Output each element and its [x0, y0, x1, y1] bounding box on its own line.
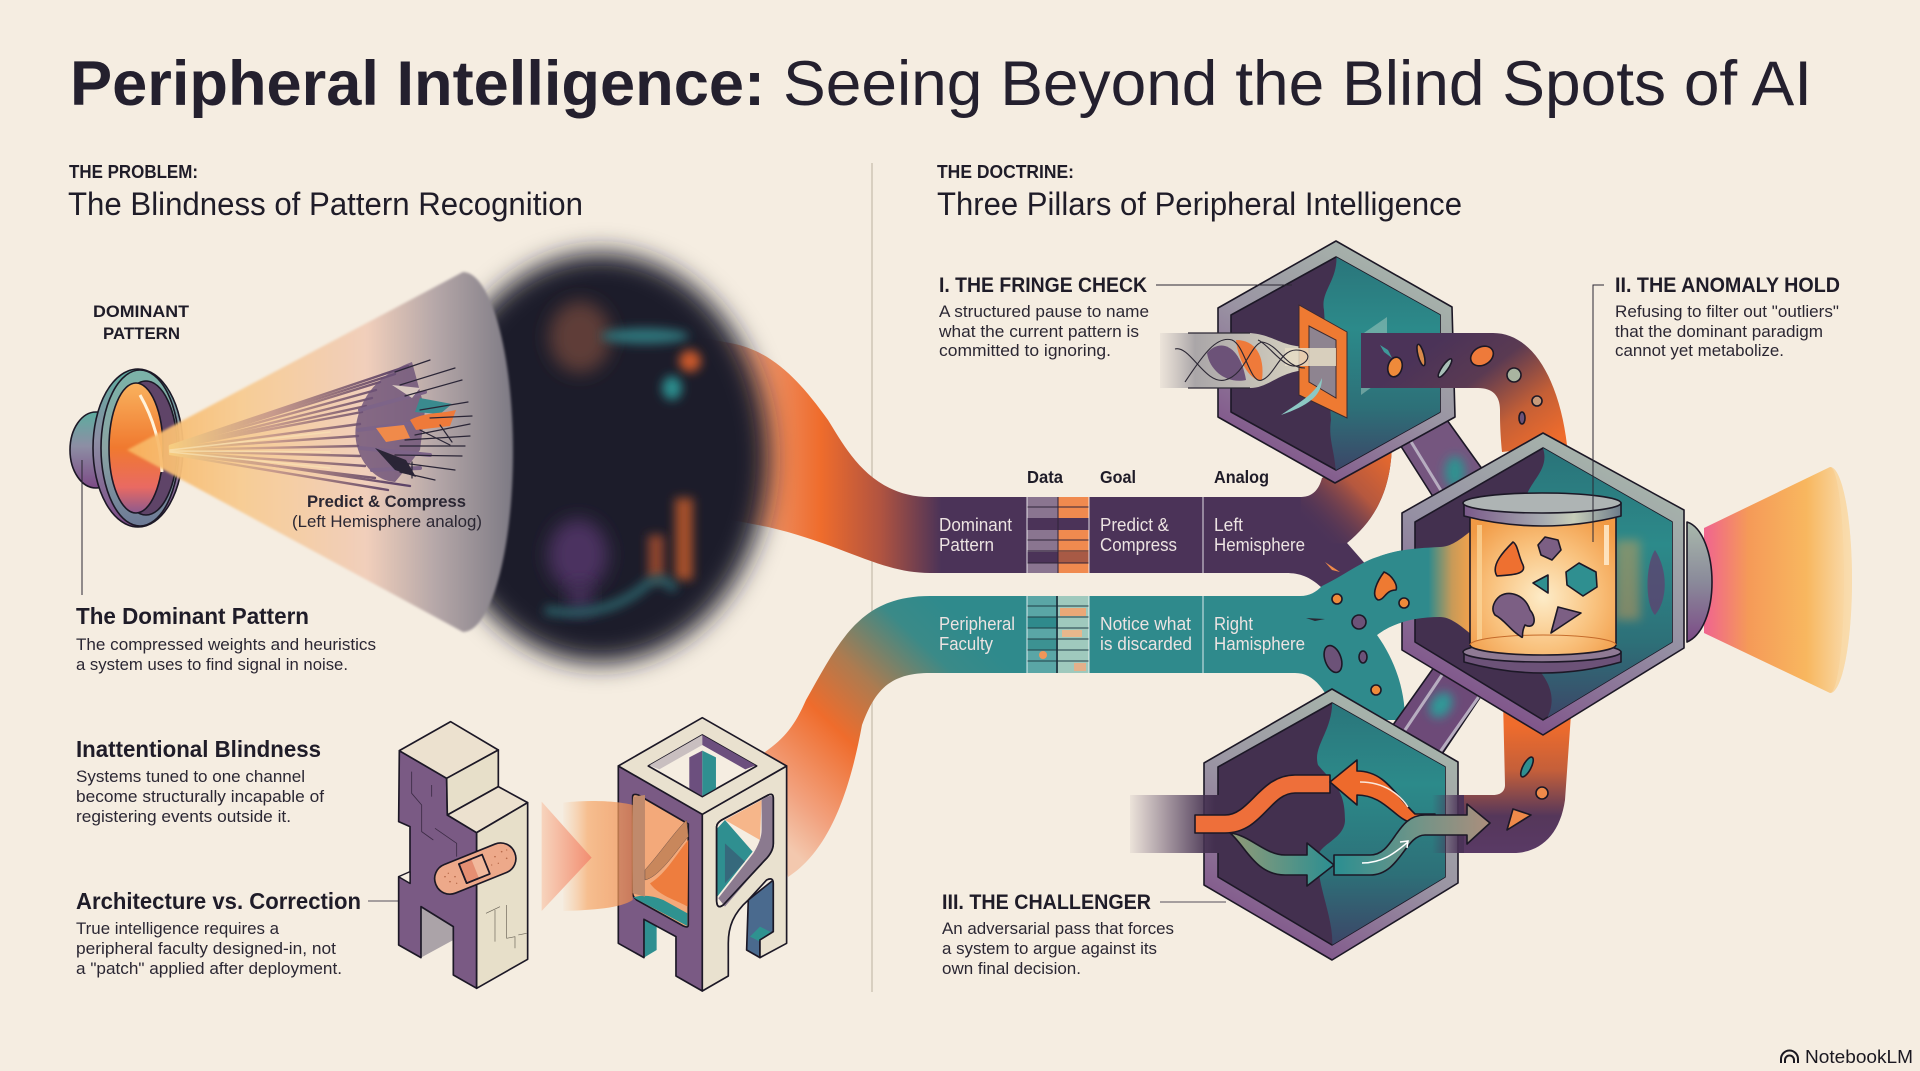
- text block: architecture vs correction: Architecture vs. Correction: [76, 888, 361, 914]
- flow band: peripheral faculty row: [765, 548, 1440, 877]
- callout: the fringe check: I. THE FRINGE CHECK: [939, 274, 1147, 297]
- table column headers: [1027, 467, 1269, 487]
- table row text: dominant pattern: Hemisphere: [1214, 535, 1305, 555]
- table row text: dominant pattern: Left: [1214, 515, 1243, 535]
- heading: the doctrine: [937, 162, 1462, 222]
- callout: the fringe check: what the current pattern is: [938, 322, 1139, 341]
- callout: the challenger: own final decision.: [942, 959, 1081, 978]
- heading: the problem: The Blindness of Pattern Recognition: [68, 186, 583, 222]
- title: Peripheral Intelligence:: [70, 49, 765, 119]
- helix of signals: [1175, 339, 1308, 382]
- callout: the challenger: [942, 891, 1226, 978]
- callout: the anomaly hold: Refusing to filter out "outliers": [1615, 302, 1839, 321]
- callout: the fringe check: committed to ignoring.: [939, 341, 1111, 360]
- text block: the dominant pattern: The compressed weights and heuristics: [76, 635, 376, 654]
- table column headers: Data: [1027, 467, 1063, 487]
- callout: the anomaly hold: that the dominant paradigm: [1615, 322, 1823, 341]
- text block: architecture vs correction: a "patch" applied after deployment.: [76, 959, 342, 978]
- arrow: correction to architecture: [542, 801, 633, 911]
- teal inflow into chamber: [1374, 530, 1472, 635]
- label: dominant pattern: DOMINANT: [93, 302, 190, 321]
- held anomalies: [1493, 537, 1597, 637]
- callout: the challenger: An adversarial pass that forces: [942, 919, 1174, 938]
- anomaly chamber: [1463, 493, 1621, 673]
- label: dominant pattern: PATTERN: [103, 324, 180, 343]
- table row text: dominant pattern: Compress: [1100, 535, 1177, 555]
- callout: the anomaly hold: cannot yet metabolize.: [1615, 341, 1784, 360]
- callout: the fringe check: [938, 274, 1292, 360]
- outflow particles: [1507, 755, 1548, 830]
- table row text: peripheral faculty: [939, 614, 1305, 654]
- text block: architecture vs correction: True intelligence requires a: [76, 919, 280, 938]
- pipe: noisy input: [1160, 333, 1336, 388]
- hexagon: anomaly hold: [1374, 433, 1684, 735]
- text block: architecture vs correction: peripheral faculty designed-in, not: [76, 939, 336, 958]
- arrow: orange counter-flow: [1195, 760, 1435, 833]
- notebooklm mark: NotebookLM: [1805, 1046, 1913, 1067]
- title: Seeing Beyond the Blind Spots of AI: [783, 49, 1812, 119]
- label: predict and compress: Predict & Compress: [307, 493, 466, 511]
- title: [70, 49, 1812, 119]
- text block: inattentional blindness: Systems tuned to one channel: [76, 767, 305, 786]
- text block: inattentional blindness: Inattentional Blindness: [76, 736, 321, 762]
- table row text: peripheral faculty: Peripheral: [939, 614, 1015, 634]
- blurred blind spot: [432, 253, 768, 663]
- output beam: [1704, 467, 1852, 693]
- table row text: peripheral faculty: Right: [1214, 614, 1253, 634]
- table row text: dominant pattern: Dominant: [939, 515, 1012, 535]
- orange fringe frame: [1281, 305, 1347, 418]
- outflow shadow: [1648, 550, 1665, 615]
- text block: the dominant pattern: a system uses to find signal in noise.: [76, 655, 348, 674]
- label: dominant pattern: [93, 302, 190, 343]
- table row text: peripheral faculty: Notice what: [1100, 614, 1191, 634]
- callout: the fringe check: A structured pause to name: [939, 302, 1149, 321]
- heading: the problem: THE PROBLEM:: [69, 162, 198, 182]
- table row text: peripheral faculty: Hamisphere: [1214, 634, 1305, 654]
- callout: the anomaly hold: II. THE ANOMALY HOLD: [1615, 274, 1840, 297]
- label: predict and compress: (Left Hemisphere analog): [292, 513, 482, 531]
- icon: patched solid block: [399, 722, 528, 988]
- text block: inattentional blindness: registering events outside it.: [76, 807, 291, 826]
- heading: the doctrine: THE DOCTRINE:: [937, 162, 1074, 182]
- table row text: peripheral faculty: is discarded: [1100, 634, 1192, 654]
- data strip: peripheral row: [1027, 596, 1089, 673]
- pipe: fringe check output: [1361, 333, 1567, 452]
- connector: upper joint: [1397, 420, 1485, 503]
- text block: the dominant pattern: [76, 603, 376, 674]
- heading: the problem: [68, 162, 583, 222]
- pipe: anomaly hold to challenger: [1420, 700, 1572, 853]
- pipe: challenger input: [1130, 795, 1230, 853]
- text block: inattentional blindness: [76, 736, 324, 826]
- compressed signal fibers: [170, 360, 472, 490]
- data strip: dominant row: [1027, 497, 1089, 573]
- icon: hollow framed block: [618, 718, 787, 991]
- pipe: fringe check particles: [1380, 342, 1542, 424]
- table row text: dominant pattern: [939, 515, 1305, 555]
- heading: the doctrine: Three Pillars of Peripheral Intelligence: [937, 186, 1462, 222]
- output lens: [1687, 522, 1712, 642]
- table row text: peripheral faculty: Faculty: [939, 634, 993, 654]
- icon: bandage: [430, 838, 520, 899]
- hexagon: the challenger: [1130, 689, 1490, 960]
- callout: the challenger: III. THE CHALLENGER: [942, 891, 1151, 914]
- hexagon: fringe check: [1160, 241, 1455, 483]
- arrow: teal forward flow: [1230, 804, 1490, 886]
- label: predict and compress: [292, 493, 482, 531]
- text block: the dominant pattern: The Dominant Pattern: [76, 603, 309, 629]
- text block: inattentional blindness: become structurally incapable of: [76, 787, 324, 806]
- flow band: dominant pattern row: [660, 330, 1392, 587]
- text block: architecture vs correction: [76, 888, 361, 978]
- table column headers: Analog: [1214, 467, 1269, 487]
- callout: the challenger: a system to argue against its: [942, 939, 1157, 958]
- lens: dominant pattern: [70, 369, 183, 527]
- table row text: dominant pattern: Pattern: [939, 535, 994, 555]
- callout: the anomaly hold: [1593, 274, 1840, 542]
- inflow particles: [1306, 562, 1409, 695]
- focus cone: [127, 272, 513, 632]
- table column headers: Goal: [1100, 467, 1136, 487]
- table row text: dominant pattern: Predict &: [1100, 515, 1169, 535]
- connector: lower joint: [1388, 663, 1485, 760]
